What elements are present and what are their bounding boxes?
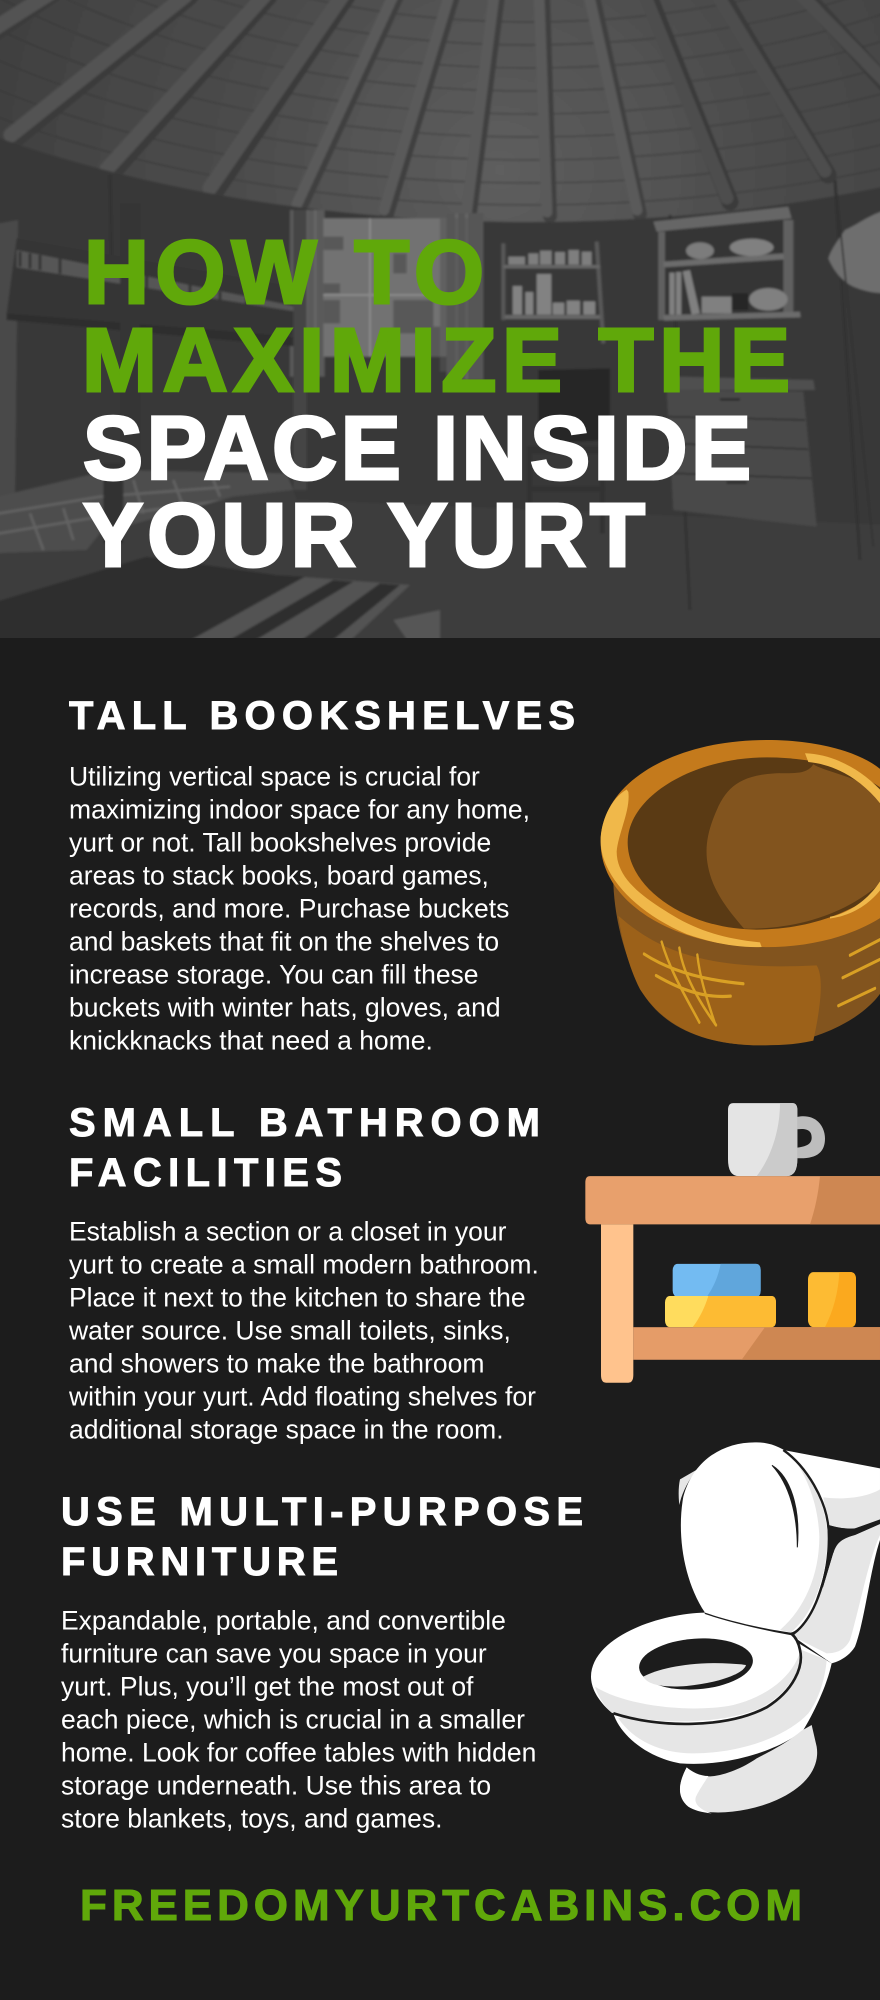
section 3 heading: FURNITURE — [61, 1540, 338, 1584]
section 3 heading — [61, 1490, 583, 1584]
dark gap between lid and tank — [828, 1519, 880, 1553]
roof with planks and rafters — [0, 0, 880, 223]
tank — [780, 1449, 880, 1528]
section 1 body text: Utilizing vertical space is crucial for — [69, 762, 480, 792]
section 3 body text — [61, 1606, 536, 1834]
section 1 body text: and baskets that fit on the shelves to — [69, 926, 499, 956]
chest of drawers — [667, 390, 817, 527]
icon: woven basket — [601, 740, 880, 1045]
desk chair — [538, 368, 610, 443]
lid — [681, 1442, 828, 1633]
section 3 body text: store blankets, toys, and games. — [61, 1804, 443, 1834]
table leg — [601, 1224, 633, 1383]
section 2 body text: additional storage space in the room. — [69, 1414, 504, 1444]
wall posts — [0, 220, 18, 496]
section 1 body text: yurt or not. Tall bookshelves provide — [69, 828, 491, 858]
section 2 body text: Place it next to the kitchen to share the — [69, 1282, 526, 1312]
dark post — [839, 234, 848, 284]
section 1 heading: TALL BOOKSHELVES — [69, 694, 575, 738]
section 2 body text: Establish a section or a closet in your — [69, 1216, 507, 1246]
section 1 body text: increase storage. You can fill these — [69, 960, 479, 990]
table top — [585, 1176, 880, 1224]
rug — [194, 576, 409, 638]
section 2 heading — [69, 1101, 540, 1195]
floor — [0, 500, 880, 650]
section 2 body text: within your yurt. Add floating shelves for — [68, 1382, 536, 1412]
section 1 body text: areas to stack books, board games, — [69, 860, 489, 890]
icon: shelf with mug and soaps — [585, 1103, 880, 1383]
title line: SPACE INSIDE: SPACE INSIDE — [83, 399, 751, 499]
section 3 body text: each piece, which is crucial in a smaller — [61, 1704, 525, 1734]
section 1 body text: maximizing indoor space for any home, — [69, 794, 530, 824]
section 1 body text: records, and more. Purchase buckets — [69, 894, 509, 924]
sunlight on floor — [394, 610, 440, 638]
blue soap — [673, 1264, 761, 1297]
section 3 body text: home. Look for coffee tables with hidden — [61, 1738, 536, 1768]
section 3 heading: USE MULTI-PURPOSE — [61, 1490, 583, 1534]
orange soap — [808, 1272, 856, 1327]
section 2 body text: water source. Use small toilets, sinks, — [68, 1316, 511, 1346]
lower shelf — [633, 1327, 880, 1360]
section 3 body text: yurt. Plus, you’ll get the most out of — [61, 1672, 474, 1702]
yellow soap — [665, 1296, 776, 1327]
cupboard with plates and books — [658, 220, 795, 320]
section 2 body text: yurt to create a small modern bathroom. — [69, 1250, 539, 1280]
pendant lamp — [828, 209, 880, 293]
open shelves with cups and vases — [503, 242, 603, 343]
title line: MAXIMIZE THE: MAXIMIZE THE — [82, 311, 790, 411]
section 2 heading: SMALL BATHROOM — [69, 1101, 540, 1145]
footer website: FREEDOMYURTCABINS.COM — [80, 1881, 802, 1930]
section 1 body text — [69, 762, 530, 1056]
title — [82, 223, 790, 586]
bowl — [613, 1640, 832, 1764]
window and curtains — [0, 203, 483, 653]
icon: toilet — [591, 1442, 880, 1813]
section 1 body text: buckets with winter hats, gloves, and — [69, 992, 501, 1022]
title line: YOUR YURT: YOUR YURT — [83, 486, 645, 586]
dark floor at lower left — [0, 558, 274, 638]
hero photo: yurt interior — [0, 0, 880, 653]
mug — [797, 1116, 825, 1158]
pedestal — [680, 1725, 817, 1812]
section 3 body text: storage underneath. Use this area to — [61, 1770, 491, 1800]
section 3 body text: Expandable, portable, and convertible — [61, 1606, 506, 1636]
section 2 body text — [68, 1216, 539, 1444]
section 2 heading: FACILITIES — [69, 1151, 342, 1195]
section 1 body text: knickknacks that need a home. — [69, 1026, 433, 1056]
section 2 body text: and showers to make the bathroom — [69, 1348, 484, 1378]
title line: HOW TO: HOW TO — [84, 223, 484, 323]
section 3 body text: furniture can save you space in your — [61, 1638, 487, 1668]
bunk bed — [7, 238, 300, 337]
seat — [591, 1613, 802, 1723]
